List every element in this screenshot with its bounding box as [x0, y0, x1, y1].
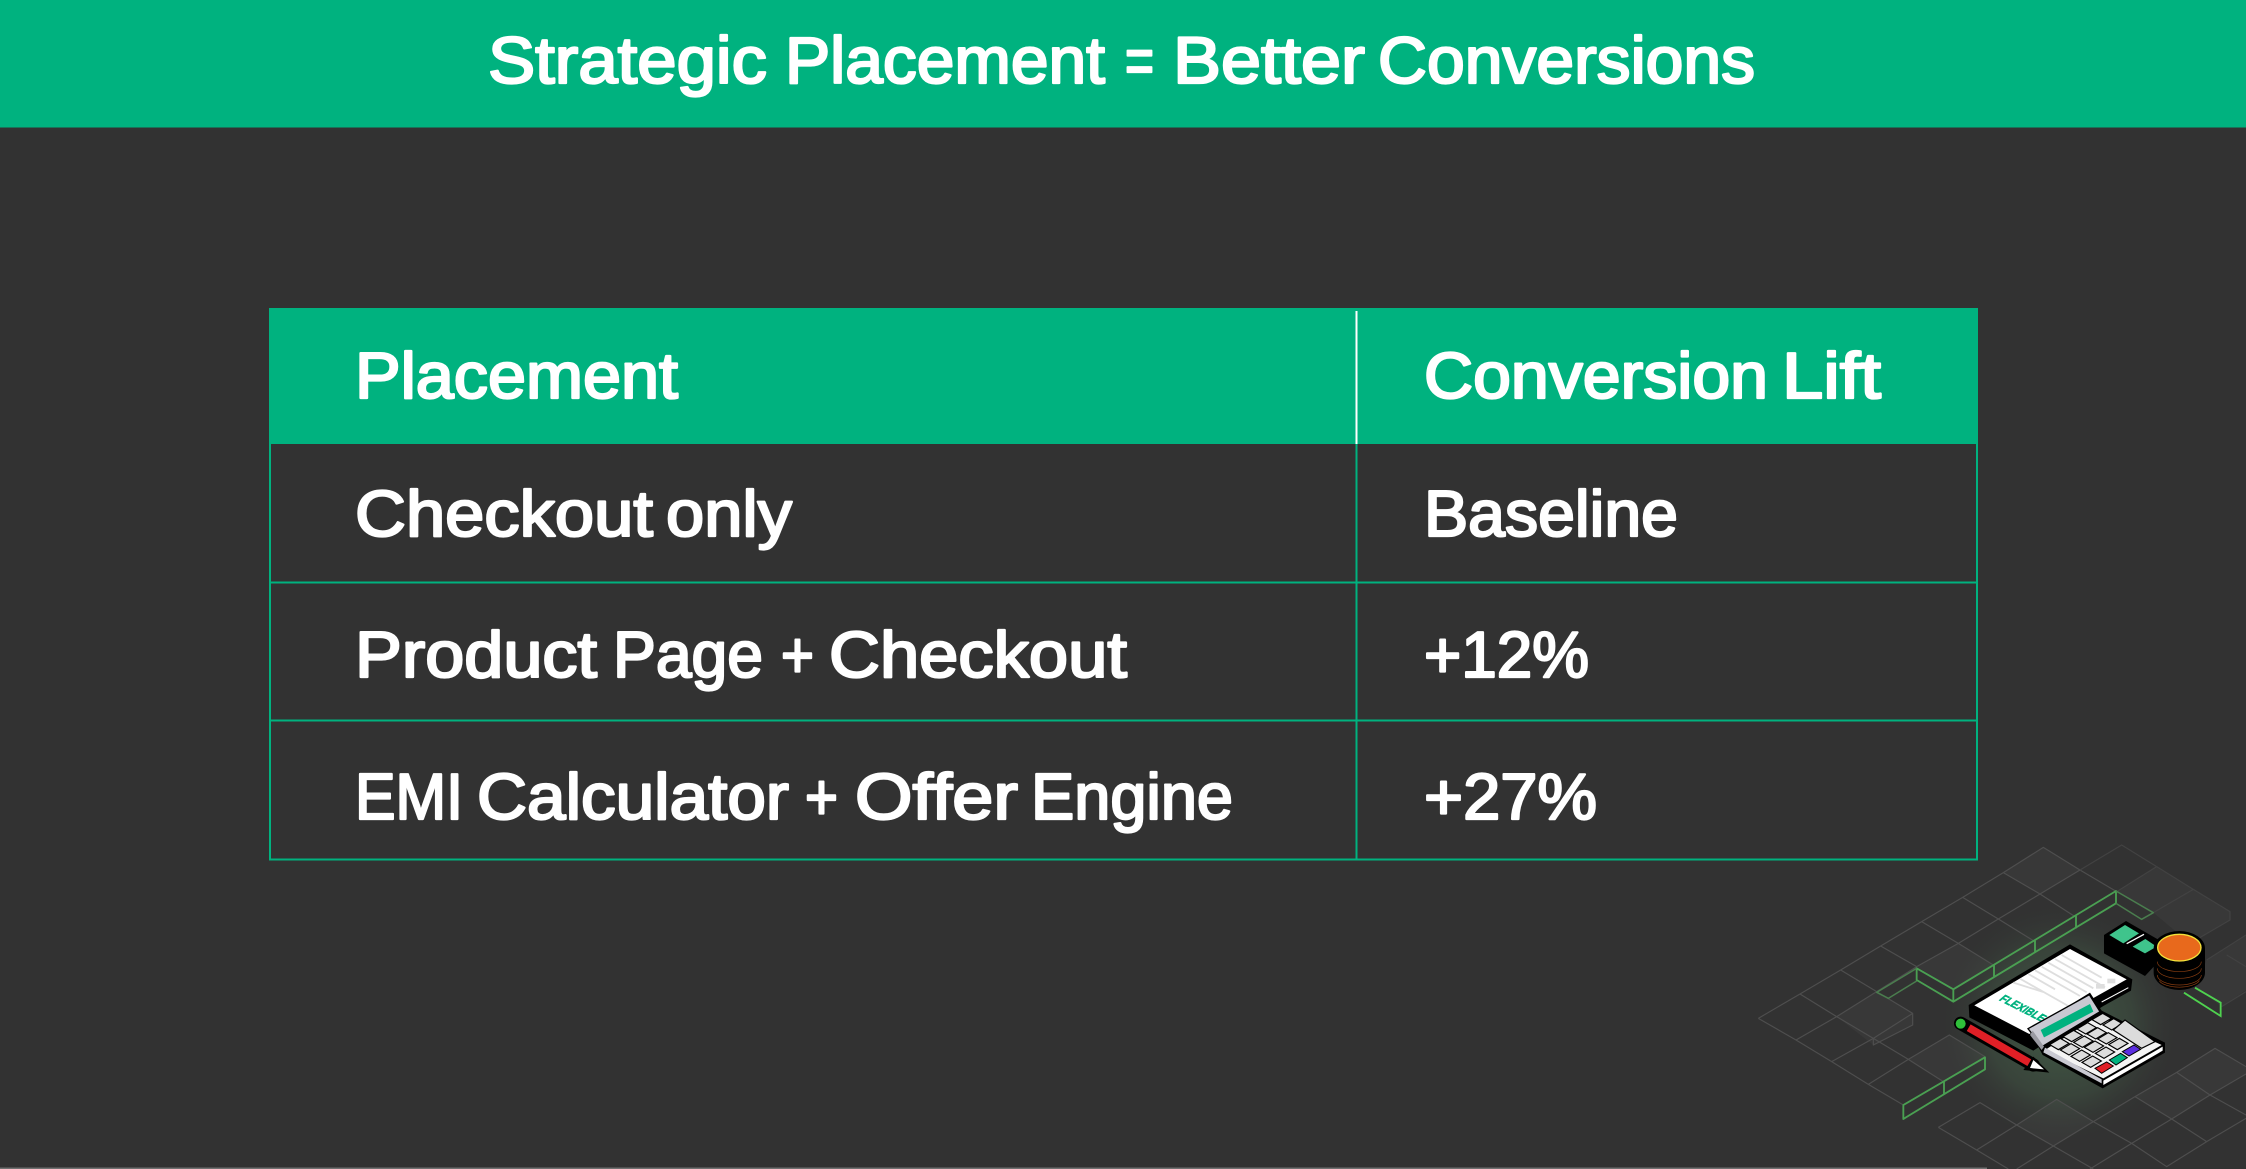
isometric floor tiles [1837, 847, 2246, 1146]
document text lines [2013, 955, 2115, 1006]
row: emi calculator + offer engine: Offer [855, 760, 1018, 833]
icon: document [1969, 944, 2132, 1051]
row: product page + checkout: Page [613, 618, 763, 691]
row: emi calculator + offer engine: Calculator [477, 760, 789, 833]
row: product page + checkout: +12% [1424, 618, 1589, 691]
calculator keys [2050, 1013, 2155, 1073]
title: Placement [785, 23, 1105, 97]
row: emi calculator + offer engine: + [805, 760, 838, 833]
icon: coin stack [2154, 931, 2205, 990]
icon: banknote stack [2104, 921, 2160, 976]
conversion lift table [269, 308, 1977, 860]
row: product page + checkout: Product [355, 618, 597, 691]
row: emi calculator + offer engine [355, 760, 1597, 833]
row: checkout only: Baseline [1424, 477, 1678, 550]
row: emi calculator + offer engine: +27% [1424, 760, 1597, 833]
title banner [0, 0, 2246, 128]
title: = [1125, 23, 1154, 97]
column heading: conversion lift: Lift [1782, 339, 1881, 412]
row: checkout only: only [666, 477, 793, 550]
isometric grid lines [1758, 847, 2246, 1169]
calculator display [2028, 995, 2100, 1047]
faint grid lines at back [2080, 845, 2246, 1007]
faint green wall outlines [1877, 891, 2153, 998]
row: emi calculator + offer engine: Engine [1031, 760, 1233, 833]
row: product page + checkout [355, 618, 1589, 691]
icon: pencil [1956, 1019, 2049, 1073]
green wall outlines [1903, 891, 2116, 1119]
flexible label: FLEXIBLE [1996, 993, 2049, 1024]
row: product page + checkout: + [781, 618, 814, 691]
row: checkout only [355, 477, 1678, 550]
title: Strategic [488, 23, 767, 97]
column heading: placement: Placement [355, 339, 678, 412]
row: product page + checkout: Checkout [829, 618, 1127, 691]
bright green wall outline [2184, 988, 2221, 1016]
table grid lines [270, 309, 1977, 860]
title: Better [1173, 23, 1365, 97]
title: Conversions [1378, 23, 1755, 97]
row: checkout only: Checkout [355, 477, 653, 550]
table header row [269, 308, 1977, 444]
glow [1907, 890, 2207, 1169]
icon: calculator [2028, 993, 2165, 1088]
row: emi calculator + offer engine: EMI [355, 760, 463, 833]
isometric illustration [1758, 845, 2246, 1169]
column heading: conversion lift: Conversion [1424, 339, 1768, 412]
